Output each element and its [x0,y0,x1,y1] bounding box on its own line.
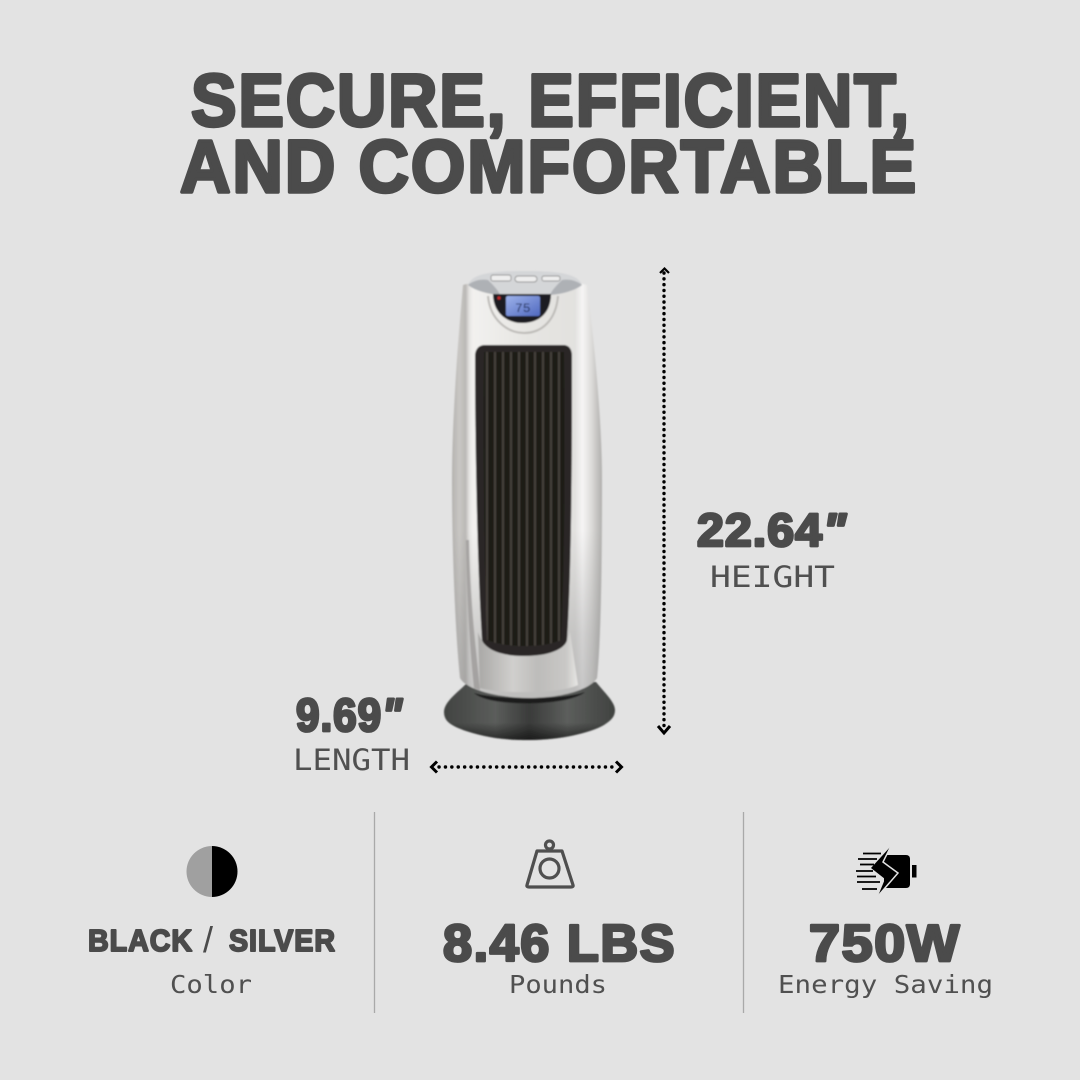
length label: 9.69" [296,689,403,741]
title: AND COMFORTABLE [180,125,918,208]
color value: SILVER [229,923,336,958]
heater shadow under body [474,692,585,703]
height label: 22.64" [697,504,847,556]
panel: weight [443,841,676,999]
length label: LENGTH [293,743,410,777]
energy value: 750W [809,915,961,973]
control panel [493,294,551,323]
height label: HEIGHT [710,560,835,594]
color value: BLACK [88,923,193,958]
control panel surround [488,296,558,333]
title: SECURE, EFFICIENT, [191,59,911,142]
column dividers [374,812,744,1013]
heater top cap [468,271,582,296]
color value: / [203,919,213,960]
LCD display [506,296,540,316]
height label [697,504,847,594]
black ribbed grille [475,345,572,656]
heater base [444,682,615,740]
heater body [452,280,602,698]
product image: tower heater [444,271,615,740]
title [180,59,918,208]
heater lower collar [478,632,578,692]
weight caption: Pounds [509,970,607,999]
LCD display: 75 [515,301,531,316]
icon: fast charging battery [856,846,916,896]
color caption: Color [170,970,252,999]
left silver edge line [466,540,480,690]
energy caption: Energy Saving [778,970,993,999]
length dimension arrow [432,762,622,772]
cap buttons [491,275,560,282]
panel: color [88,846,336,999]
weight value: 8.46 LBS [443,915,676,973]
height dimension arrow [658,268,670,733]
icon: kettlebell weight [527,841,573,887]
icon: half black half silver circle [186,846,238,897]
panel: energy [778,846,993,999]
color value [88,919,336,960]
indicator light [497,296,501,300]
length label [293,689,410,777]
